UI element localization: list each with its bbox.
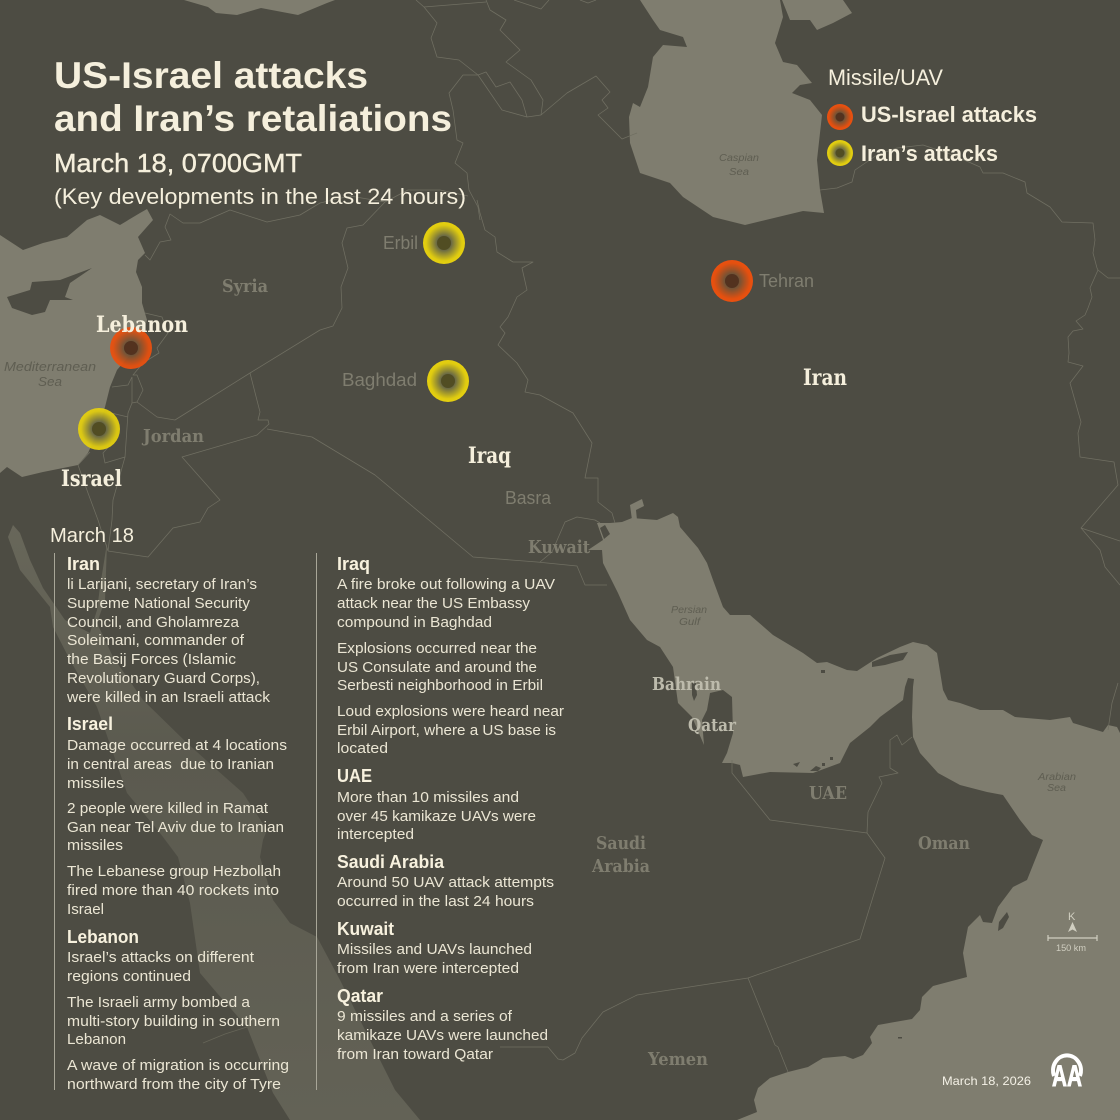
scale bar and north arrow bbox=[1048, 911, 1097, 953]
block: Iraq: A fire broke out following a UAV bbox=[337, 576, 555, 593]
block: Saudi Arabia bbox=[337, 851, 554, 910]
label: Persian Gulf bbox=[671, 605, 707, 628]
block: Lebanon: Lebanon bbox=[67, 1031, 126, 1048]
label: Caspian Sea: Sea bbox=[729, 167, 749, 178]
island: Bubiyan bbox=[600, 525, 610, 539]
label: Oman: Oman bbox=[918, 833, 970, 854]
marker: Israel strike bbox=[78, 408, 120, 450]
label: Mediterranean Sea bbox=[4, 359, 96, 389]
block: Lebanon: A wave of migration is occurring bbox=[67, 1057, 289, 1074]
label: Persian Gulf: Persian bbox=[671, 605, 707, 616]
block: Qatar: kamikaze UAVs were launched bbox=[337, 1027, 548, 1044]
block: Iraq: Explosions occurred near the bbox=[337, 640, 537, 657]
block: UAE: intercepted bbox=[337, 826, 414, 843]
label: Yemen: Yemen bbox=[647, 1049, 708, 1070]
legend icon: Iran's attacks bbox=[827, 140, 853, 166]
title: and Iran’s retaliations bbox=[54, 98, 452, 139]
subtitle: date: March 18, 0700GMT bbox=[54, 148, 302, 178]
label: Iraq: Iraq bbox=[468, 443, 511, 469]
block: Israel: Israel bbox=[67, 713, 113, 734]
block: Kuwait: Missiles and UAVs launched bbox=[337, 941, 532, 958]
borders: Levant bbox=[145, 190, 468, 260]
borders: Arabian Peninsula bbox=[500, 735, 912, 1072]
Persian Gulf and Arabian Sea bbox=[588, 513, 1120, 1120]
logo: Anadolu Agency bbox=[1052, 1055, 1082, 1093]
block: Lebanon: The Israeli army bombed a bbox=[67, 994, 251, 1011]
block: Lebanon: regions continued bbox=[67, 968, 191, 985]
label: Jordan: Jordan bbox=[141, 426, 204, 447]
borders: Iran and Iraq bbox=[477, 200, 615, 523]
legend bbox=[827, 65, 1037, 166]
sea labels bbox=[4, 153, 1076, 794]
block: Qatar: 9 missiles and a series of bbox=[337, 1008, 513, 1025]
label: Saudi Arabia: Saudi bbox=[596, 833, 646, 854]
section heading: March 18: March 18 bbox=[50, 524, 134, 547]
label: Syria: Syria bbox=[222, 276, 268, 297]
label: Erbil: Erbil bbox=[383, 233, 418, 253]
block: Israel: Israel bbox=[67, 901, 104, 918]
Shatt al-Arab inlet bbox=[630, 499, 644, 520]
Caspian Sea north-east bbox=[782, 0, 852, 30]
label: UAE: UAE bbox=[809, 783, 847, 804]
Mediterranean Sea bbox=[0, 209, 153, 477]
block: Iraq: Loud explosions were heard near bbox=[337, 703, 564, 720]
block: Israel: missiles bbox=[67, 775, 124, 792]
label: Qatar: Qatar bbox=[688, 715, 736, 736]
block: Iran: Revolutionary Guard Corps), bbox=[67, 670, 260, 687]
block: Kuwait bbox=[337, 918, 532, 977]
block: Iraq: located bbox=[337, 740, 388, 757]
marker: Lebanon strike bbox=[110, 327, 152, 369]
block: Iraq: US Consulate and around the bbox=[337, 659, 537, 676]
label: Mediterranean Sea: Mediterranean bbox=[4, 359, 96, 374]
block: Iran bbox=[66, 553, 271, 706]
block: Iran: were killed in an Israeli attack bbox=[66, 689, 271, 706]
block: Iraq: compound in Baghdad bbox=[337, 614, 492, 631]
label: Bahrain: Bahrain bbox=[652, 674, 721, 695]
title bbox=[54, 55, 452, 139]
block: Israel: fired more than 40 rockets into bbox=[67, 882, 279, 899]
label: Saudi Arabia bbox=[591, 833, 650, 877]
label: Baghdad: Baghdad bbox=[342, 370, 417, 390]
label: Iran: Iran bbox=[803, 365, 847, 391]
logo: Anadolu Agency: AA bbox=[1052, 1060, 1082, 1093]
block: Kuwait: Kuwait bbox=[337, 918, 394, 939]
block: Israel: 2 people were killed in Ramat bbox=[67, 800, 269, 817]
block: Qatar bbox=[337, 985, 548, 1063]
panel: left column bbox=[66, 553, 289, 1093]
marker: Erbil strike bbox=[423, 222, 465, 264]
block: UAE bbox=[337, 765, 536, 843]
block: Lebanon bbox=[67, 926, 289, 1093]
block: UAE: UAE bbox=[337, 765, 372, 786]
label: Arabian Sea: Sea bbox=[1047, 783, 1066, 794]
island: Bahrain bbox=[692, 683, 697, 701]
island: Socotra bbox=[898, 1037, 902, 1038]
block: Saudi Arabia: Saudi Arabia bbox=[337, 851, 445, 872]
block: Iran: Council, and Gholamreza bbox=[67, 614, 240, 631]
divider lines bbox=[54, 553, 316, 1090]
island: Masirah bbox=[998, 912, 1009, 931]
subtitle: key developments: (Key developments in the last 24 hours) bbox=[54, 184, 466, 209]
label: Saudi Arabia: Arabia bbox=[591, 856, 650, 877]
borders: Jordan and Saudi Arabia bbox=[108, 373, 269, 557]
label: Lebanon: Lebanon bbox=[96, 312, 188, 338]
scale bar and north arrow: 150 km bbox=[1056, 943, 1086, 953]
block: Israel: missiles bbox=[67, 837, 123, 854]
block: Iraq: Erbil Airport, where a US base is bbox=[337, 722, 556, 739]
marker: Baghdad strike bbox=[427, 360, 469, 402]
city labels bbox=[342, 233, 814, 508]
block: Iran: Supreme National Security bbox=[67, 595, 251, 612]
block: Iran: li Larijani, secretary of Iran’s bbox=[67, 576, 257, 593]
block: Iran: Iran bbox=[67, 553, 100, 574]
legend icon: US-Israel attacks bbox=[827, 104, 853, 130]
label: Basra: Basra bbox=[505, 488, 552, 508]
block: Kuwait: from Iran were intercepted bbox=[337, 960, 519, 977]
borders: Turkey and Caucasus bbox=[416, 0, 637, 220]
island: Cyprus bbox=[7, 268, 92, 315]
block: Iraq bbox=[337, 553, 564, 757]
block: Israel bbox=[67, 713, 287, 918]
label: Persian Gulf: Gulf bbox=[679, 617, 701, 628]
footer date: March 18, 2026 bbox=[942, 1074, 1031, 1088]
block: Lebanon: multi-story building in southern bbox=[67, 1013, 280, 1030]
block: Iraq: Serbesti neighborhood in Erbil bbox=[337, 677, 543, 694]
marker: Tehran strike bbox=[711, 260, 753, 302]
block: UAE: More than 10 missiles and bbox=[337, 789, 519, 806]
block: Iraq: Iraq bbox=[337, 553, 370, 574]
island: UAE coast isles bbox=[793, 670, 833, 771]
block: Lebanon: Israel’s attacks on different bbox=[67, 949, 255, 966]
block: Israel: in central areas due to Iranian bbox=[67, 756, 274, 773]
block: Israel: Damage occurred at 4 locations bbox=[67, 737, 287, 754]
block: Saudi Arabia: Around 50 UAV attack attempts bbox=[337, 874, 554, 891]
block: Lebanon: Lebanon bbox=[67, 926, 139, 947]
label: Mediterranean Sea: Sea bbox=[38, 374, 62, 389]
label: Arabian Sea: Arabian bbox=[1037, 772, 1076, 783]
legend text: US-Israel attacks: US-Israel attacks bbox=[861, 102, 1037, 127]
label: Caspian Sea bbox=[719, 153, 759, 178]
block: UAE: over 45 kamikaze UAVs were bbox=[337, 808, 536, 825]
block: Iran: the Basij Forces (Islamic bbox=[67, 651, 237, 668]
block: Saudi Arabia: occurred in the last 24 hours bbox=[337, 893, 534, 910]
label: Caspian Sea: Caspian bbox=[719, 153, 759, 164]
panel: right column bbox=[337, 553, 564, 1063]
label: Arabian Sea bbox=[1037, 772, 1076, 794]
block: Israel: The Lebanese group Hezbollah bbox=[67, 863, 281, 880]
island: Qeshm bbox=[872, 652, 908, 667]
Black Sea bbox=[184, 0, 335, 15]
title: US-Israel attacks bbox=[54, 55, 368, 96]
block: Lebanon: northward from the city of Tyre bbox=[67, 1076, 281, 1093]
legend heading: Missile/UAV bbox=[828, 65, 943, 90]
islands bbox=[7, 268, 1009, 1038]
Red Sea bbox=[8, 525, 420, 1120]
block: Iraq: attack near the US Embassy bbox=[337, 595, 530, 612]
block: Qatar: Qatar bbox=[337, 985, 383, 1006]
border: faint African line bbox=[203, 1027, 247, 1043]
Caspian Sea bbox=[629, 0, 824, 225]
block: Qatar: from Iran toward Qatar bbox=[337, 1046, 493, 1063]
scale bar and north arrow: K bbox=[1068, 911, 1076, 923]
block: Iran: Soleimani, commander of bbox=[67, 632, 245, 649]
label: Tehran: Tehran bbox=[759, 271, 814, 291]
label: Israel: Israel bbox=[61, 466, 122, 492]
legend text: Iran's attacks: Iran’s attacks bbox=[861, 141, 998, 166]
country labels bbox=[61, 276, 970, 1070]
block: Israel: Gan near Tel Aviv due to Iranian bbox=[67, 819, 284, 836]
borders: Iran east bbox=[820, 145, 1120, 730]
label: Kuwait: Kuwait bbox=[528, 537, 591, 558]
